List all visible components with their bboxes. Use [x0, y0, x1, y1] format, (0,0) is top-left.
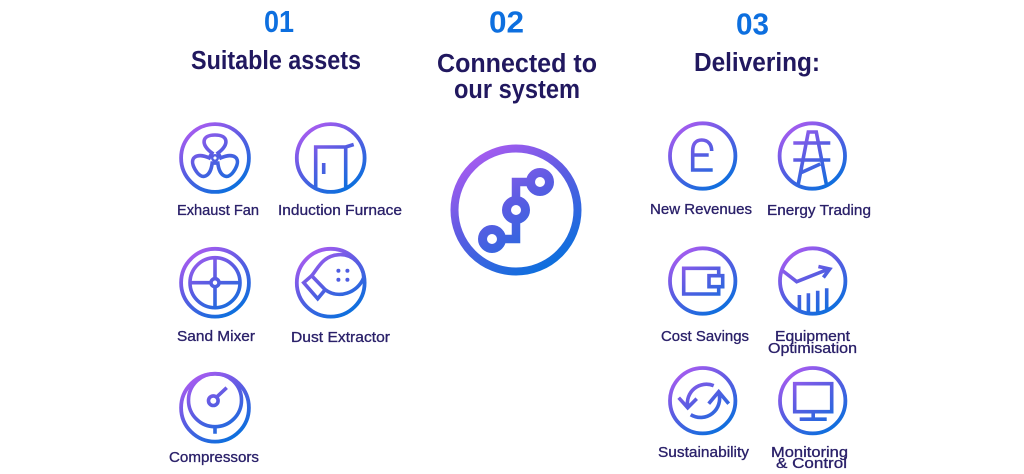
benefit: equipment optimisation [768, 248, 857, 357]
icon: rising chart [780, 248, 845, 314]
label: compressors: Compressors [169, 450, 259, 466]
number 02: 02 [489, 4, 524, 40]
icon: monitor [780, 368, 845, 433]
asset: sand mixer [177, 249, 255, 345]
icon: mixer wheel [181, 249, 249, 317]
heading second line: our system [454, 76, 580, 104]
label: new revenues: New Revenues [650, 202, 752, 218]
panel: suitable assets [169, 4, 402, 466]
icon: dust extractor [297, 249, 365, 317]
label: sustainability: Sustainability [658, 445, 750, 461]
label: energy trading: Energy Trading [767, 203, 871, 219]
icon: recycling arrows [670, 368, 735, 433]
label: equipment: Equipment [775, 329, 850, 345]
label: exhaust fan: Exhaust Fan [177, 203, 259, 219]
number 01: 01 [264, 4, 294, 39]
asset: dust extractor [291, 249, 390, 346]
benefit: new revenues [650, 123, 752, 218]
label: cost savings: Cost Savings [661, 329, 749, 345]
asset: induction furnace [278, 124, 402, 219]
label: induction furnace: Induction Furnace [278, 203, 402, 219]
benefit: cost savings [661, 248, 749, 345]
icon: compressor gauge [181, 374, 249, 442]
panel: delivering [650, 6, 871, 472]
icon: pound sign [670, 123, 735, 189]
benefit: monitoring and control [771, 368, 848, 472]
number 03: 03 [736, 6, 769, 42]
asset: compressors [169, 374, 259, 466]
heading: suitable assets: Suitable assets [191, 47, 361, 75]
label: and control: & Control [776, 456, 847, 472]
icon: fan [181, 124, 249, 192]
icon: pylon [780, 123, 845, 189]
label: optimisation: Optimisation [768, 341, 857, 357]
label: sand mixer: Sand Mixer [177, 329, 255, 345]
icon: furnace [297, 124, 365, 192]
benefit: energy trading [767, 123, 871, 219]
icon: wallet [670, 248, 735, 314]
label: dust extractor: Dust Extractor [291, 330, 390, 346]
heading: connected to our system: Connected to [437, 50, 597, 78]
heading: delivering: Delivering: [694, 49, 820, 77]
benefit: sustainability [658, 368, 750, 461]
asset: exhaust fan [177, 124, 259, 219]
icon: connected nodes [454, 148, 578, 272]
panel: connected to our system [437, 4, 597, 272]
label: monitoring: Monitoring [771, 445, 848, 461]
